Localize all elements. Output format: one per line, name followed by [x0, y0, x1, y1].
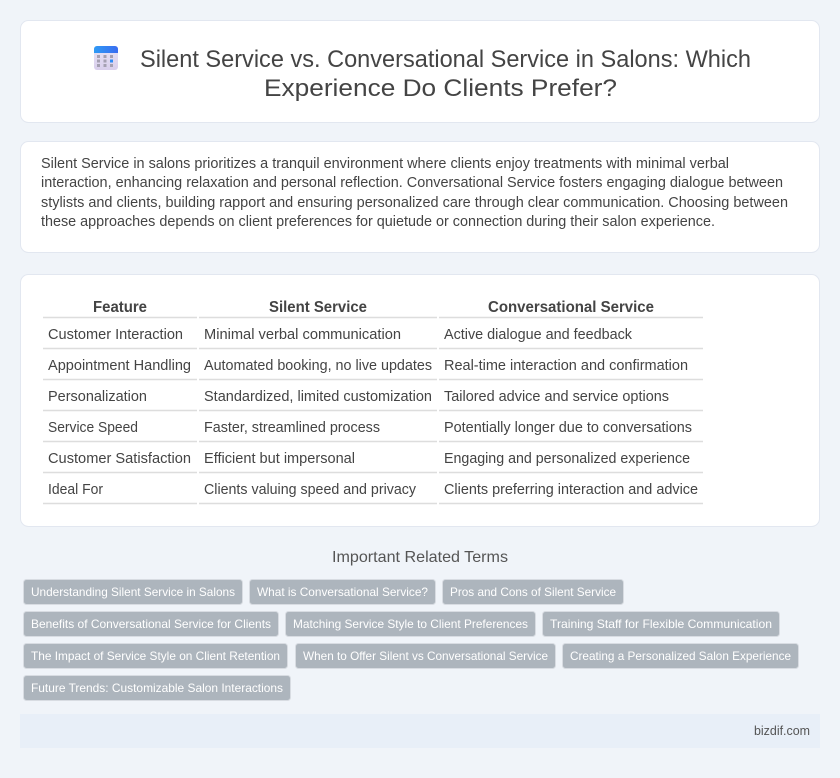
- table row: customer satisfaction: Engaging and personalized experience: [444, 451, 690, 467]
- table row: customer interaction: Customer Interaction: [48, 327, 183, 343]
- table row: service speed: [48, 420, 692, 436]
- table row: customer satisfaction: Efficient but impersonal: [204, 451, 355, 467]
- tag: [286, 612, 536, 636]
- heading: related terms: Important Related Terms: [332, 549, 508, 566]
- panel: comparison table: [20, 274, 820, 526]
- tag: Pros and Cons of Silent Service: [450, 585, 616, 599]
- table row: appointment handling: Automated booking, no live updates: [204, 358, 432, 374]
- tag: [562, 644, 798, 668]
- title: Silent Service vs. Conversational Service in Salons: Which: [140, 46, 751, 73]
- footer: bizdif.com: [754, 723, 810, 738]
- footer: [20, 714, 820, 748]
- table row: appointment handling: [48, 358, 688, 374]
- text block: introduction: interaction, enhancing relaxation and personal reflection. Conversational Service fosters engaging dialogue between: [41, 175, 783, 191]
- tag: [24, 644, 288, 668]
- table header: [93, 299, 654, 316]
- table row: customer interaction: Minimal verbal communication: [204, 327, 401, 343]
- text block: introduction: these approaches depends on client preferences for quietude or connection during their salon experience.: [41, 214, 715, 230]
- table row: customer satisfaction: [48, 451, 690, 467]
- panel: header: [20, 20, 820, 122]
- table row: customer interaction: [48, 327, 633, 343]
- tag: [24, 580, 242, 604]
- table row: customer satisfaction: Customer Satisfaction: [48, 451, 191, 467]
- panel: introduction: [20, 142, 820, 252]
- tag: [24, 612, 278, 636]
- tag: Understanding Silent Service in Salons: [31, 585, 235, 599]
- table row: appointment handling: Real-time interaction and confirmation: [444, 358, 688, 374]
- text block: introduction: stylists and clients, building rapport and ensuring personalized care through clear communication. Choosing between: [41, 195, 788, 211]
- table row: service speed: Faster, streamlined process: [204, 420, 380, 436]
- tag: When to Offer Silent vs Conversational Service: [303, 649, 548, 663]
- tag: [542, 612, 780, 636]
- table row: ideal for: Clients valuing speed and privacy: [204, 482, 417, 498]
- table row: personalization: Personalization: [48, 389, 147, 405]
- tag: What is Conversational Service?: [257, 585, 428, 599]
- text block: introduction: [41, 156, 788, 230]
- table row: appointment handling: Appointment Handling: [48, 358, 191, 374]
- table row: service speed: Service Speed: [48, 420, 138, 436]
- title: [140, 46, 751, 102]
- tag: Future Trends: Customizable Salon Interactions: [31, 681, 283, 695]
- table row: ideal for: Ideal For: [48, 482, 103, 498]
- table header: Feature: [93, 299, 147, 316]
- table row: personalization: Standardized, limited customization: [204, 389, 432, 405]
- table row: ideal for: [48, 482, 698, 498]
- text block: introduction: Silent Service in salons prioritizes a tranquil environment where clients enjoy treatments with minimal verbal: [41, 156, 729, 172]
- table row: personalization: [48, 389, 669, 405]
- table header: Conversational Service: [488, 299, 654, 316]
- related term tags: [24, 580, 798, 700]
- table header: Silent Service: [269, 299, 367, 316]
- tag: [442, 580, 624, 604]
- tag: Creating a Personalized Salon Experience: [570, 649, 791, 663]
- tag: [24, 676, 290, 700]
- icon: calendar: [94, 46, 118, 70]
- tag: [250, 580, 436, 604]
- tag: Matching Service Style to Client Preferences: [293, 617, 528, 631]
- title: Experience Do Clients Prefer?: [264, 75, 617, 102]
- table row: customer interaction: Active dialogue and feedback: [444, 327, 633, 343]
- table row: ideal for: Clients preferring interaction and advice: [444, 482, 698, 498]
- table row: service speed: Potentially longer due to conversations: [444, 420, 692, 436]
- tag: The Impact of Service Style on Client Retention: [31, 649, 280, 663]
- tag: [296, 644, 556, 668]
- tag: Training Staff for Flexible Communication: [550, 617, 772, 631]
- tag: Benefits of Conversational Service for Clients: [31, 617, 271, 631]
- table row: personalization: Tailored advice and service options: [444, 389, 669, 405]
